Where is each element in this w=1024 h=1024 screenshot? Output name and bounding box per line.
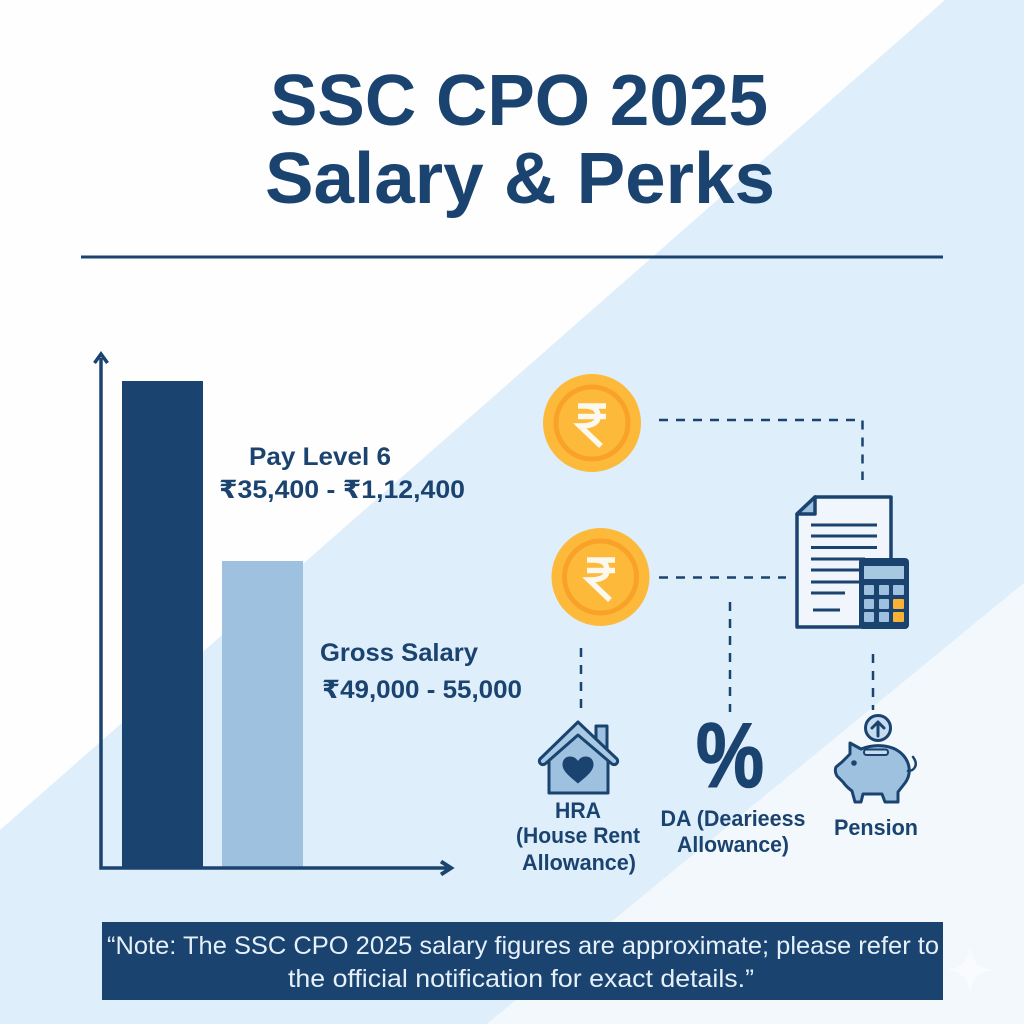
note banner: the official notification for exact details.” bbox=[288, 965, 754, 993]
label: HRA: (House Rent bbox=[516, 823, 641, 848]
pig body bbox=[835, 743, 909, 802]
label: DA bbox=[660, 806, 806, 857]
label: HRA: Allowance) bbox=[522, 850, 636, 875]
coin with up arrow bbox=[866, 716, 890, 740]
chart axes bbox=[94, 354, 451, 874]
document sheet bbox=[797, 497, 891, 627]
title: SSC CPO 2025 bbox=[270, 61, 768, 141]
bar: gross salary bbox=[222, 561, 303, 867]
label: DA: DA (Dearieess bbox=[660, 806, 806, 831]
note banner: “Note: The SSC CPO 2025 salary figures are approximate; please refer to bbox=[107, 932, 939, 960]
dashed connectors bbox=[581, 420, 873, 712]
bar: pay level 6 bbox=[122, 381, 203, 868]
label: HRA: HRA bbox=[555, 798, 601, 823]
icon: rupee coin top bbox=[543, 374, 641, 472]
title: Salary & Perks bbox=[265, 139, 775, 219]
label: pay level 6 bbox=[219, 443, 465, 504]
title bbox=[265, 61, 775, 219]
label: pension: Pension bbox=[834, 815, 918, 840]
label: gross salary bbox=[320, 639, 522, 704]
bar chart bbox=[94, 354, 451, 874]
icon: percent sign: % bbox=[696, 705, 764, 807]
label: pay level 6: ₹35,400 - ₹1,12,400 bbox=[219, 476, 465, 504]
label: gross salary: ₹49,000 - 55,000 bbox=[322, 676, 522, 704]
icon: document with calculator bbox=[797, 497, 909, 629]
label: HRA bbox=[516, 798, 641, 875]
calculator bbox=[859, 558, 909, 629]
label: DA: Allowance) bbox=[677, 832, 789, 857]
label: pay level 6: Pay Level 6 bbox=[249, 443, 391, 471]
label: gross salary: Gross Salary bbox=[320, 639, 478, 667]
icon: faint sparkle bbox=[946, 945, 994, 995]
note banner bbox=[102, 922, 943, 1000]
icon: house with heart bbox=[539, 722, 618, 793]
icon: piggy bank bbox=[835, 716, 916, 802]
icon: rupee coin bottom bbox=[552, 528, 650, 626]
